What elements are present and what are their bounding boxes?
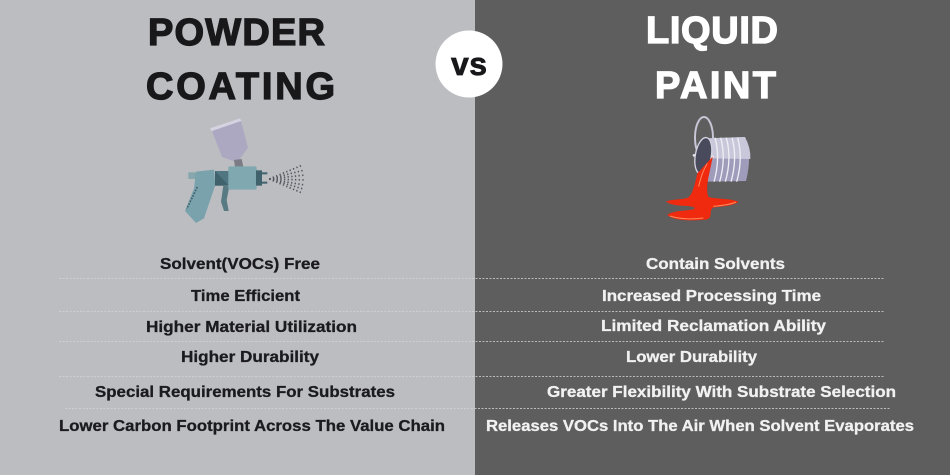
heading: powder coating [146,12,335,108]
list: liquid paint attributes: Increased Processing Time [602,288,821,305]
list: liquid paint attributes: Contain Solvents [646,256,785,273]
vs badge [436,30,502,98]
heading: liquid paint: PAINT [655,65,776,107]
icon: paint can pouring red paint [666,117,750,220]
heading: liquid paint: LIQUID [646,10,778,52]
list: powder coating attributes: Higher Material Utilization [146,319,357,336]
heading: powder coating: POWDER [148,12,325,54]
list: powder coating attributes: Lower Carbon Footprint Across The Value Chain [59,418,445,435]
list: powder coating attributes [59,256,445,435]
list: powder coating attributes: Solvent(VOCs) Free [160,256,320,273]
dashed row dividers [59,278,890,408]
list: liquid paint attributes: Greater Flexibility With Substrate Selection [547,384,896,401]
list: liquid paint attributes [486,256,914,435]
panel: powder coating background [0,0,475,475]
vs badge: vs [451,46,487,82]
list: powder coating attributes: Special Requirements For Substrates [95,384,395,401]
icon: spray gun [185,118,305,223]
list: powder coating attributes: Higher Durability [181,349,319,366]
list: powder coating attributes: Time Efficient [191,288,301,305]
list: liquid paint attributes: Releases VOCs Into The Air When Solvent Evaporates [486,418,914,435]
heading: liquid paint [646,10,778,107]
list: liquid paint attributes: Limited Reclamation Ability [601,318,826,335]
spray mist [269,165,305,193]
panel: liquid paint background [475,0,950,475]
list: liquid paint attributes: Lower Durability [626,349,757,366]
heading: powder coating: COATING [146,66,335,108]
